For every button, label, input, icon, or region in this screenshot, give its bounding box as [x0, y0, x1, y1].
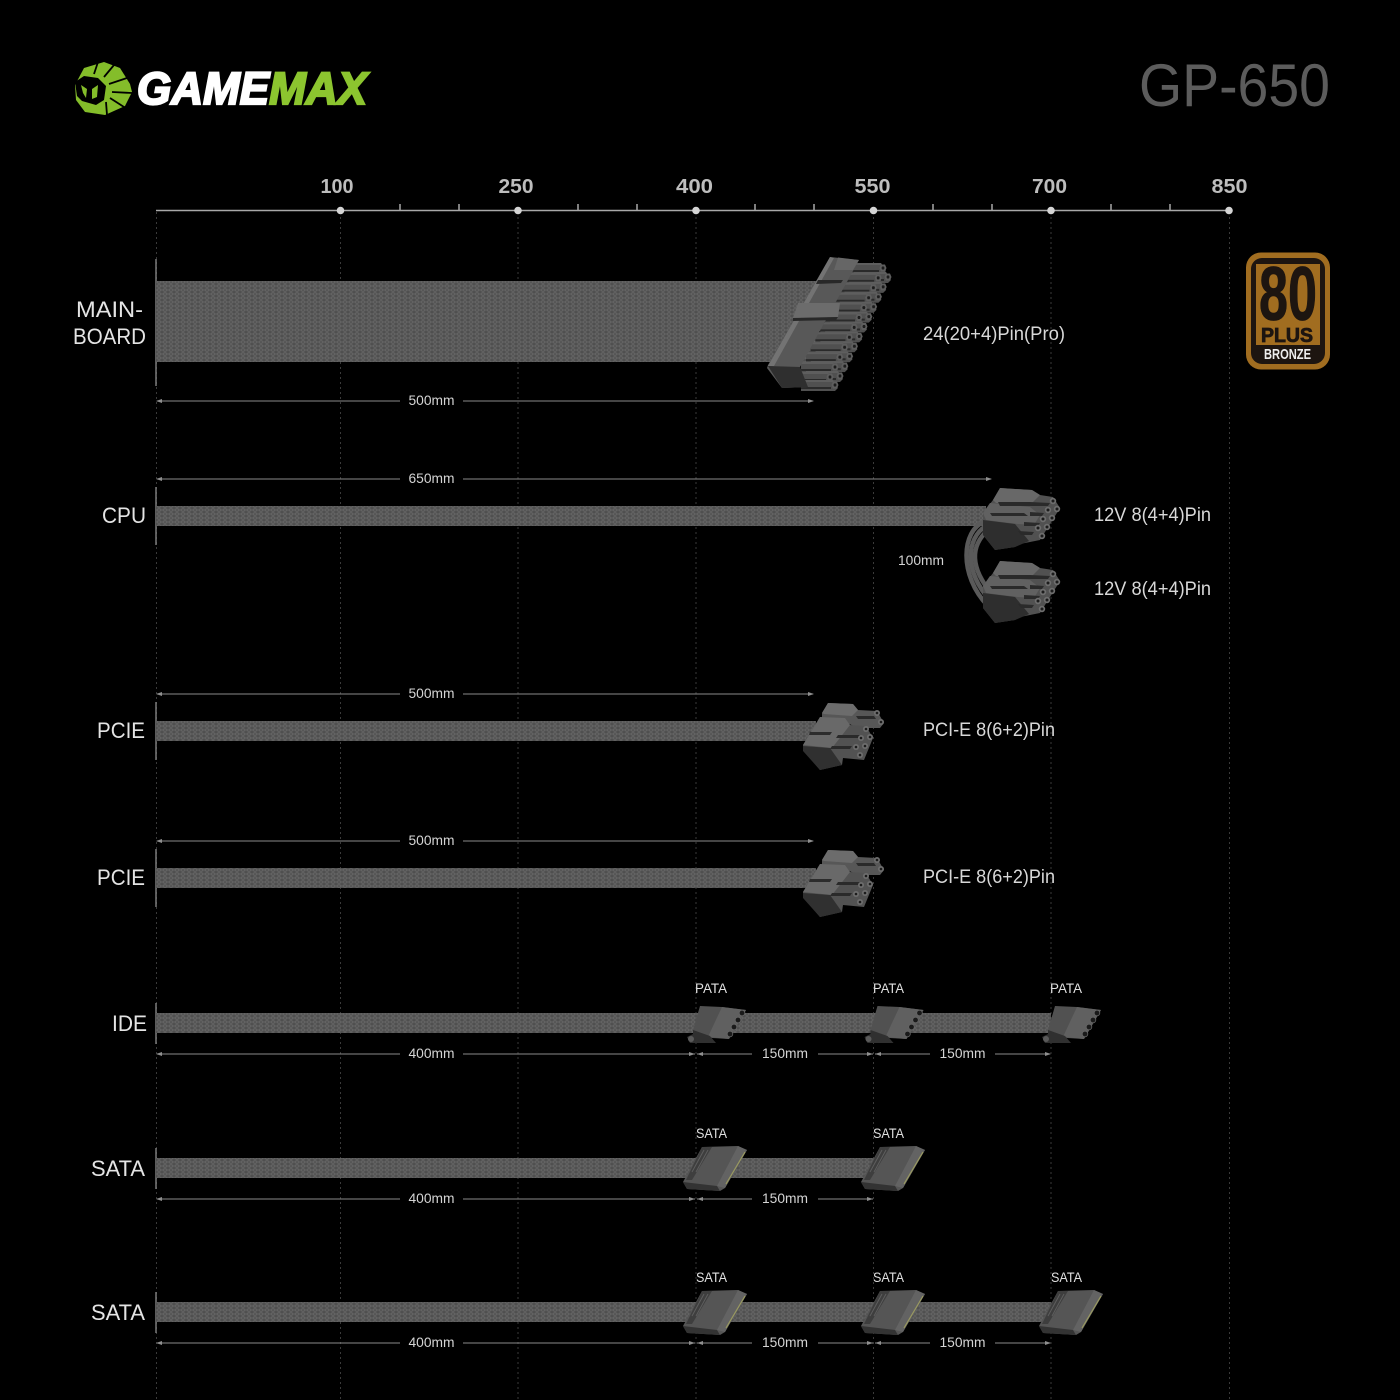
dimensions: 150mm	[762, 1045, 808, 1061]
row: CPU	[102, 470, 1211, 623]
row label: CPU	[102, 503, 146, 528]
connector label upper: 12V 8(4+4)Pin	[1094, 505, 1211, 526]
dimensions	[156, 1334, 1051, 1350]
connector: 8-pin upper	[983, 488, 1060, 550]
dimensions: 150mm	[762, 1190, 808, 1206]
connector: 24-pin	[767, 257, 892, 391]
badge: 80 Plus Bronze: PLUS	[1261, 325, 1313, 347]
length axis	[156, 176, 1248, 214]
row label: BOARD	[73, 324, 146, 349]
cable	[156, 868, 816, 888]
dimensions: 400mm	[408, 1190, 454, 1206]
connector: PATA 2	[864, 1006, 924, 1043]
row label: SATA	[91, 1156, 145, 1181]
logo: GAMEMAX	[75, 62, 370, 115]
icon: lion head	[75, 62, 132, 115]
connector: PATA 3	[1042, 1006, 1101, 1043]
row label: MAIN-	[76, 297, 143, 322]
connector: PCI-E	[803, 850, 884, 917]
connector names: PATA	[1050, 980, 1083, 996]
connector names	[695, 980, 1083, 996]
row: PCIE 1	[97, 685, 1055, 770]
dimension: 500mm	[156, 832, 814, 848]
cable	[156, 1158, 876, 1178]
connector: SATA 3	[1039, 1290, 1103, 1335]
row label: SATA	[91, 1300, 145, 1325]
connector label: PCI-E 8(6+2)Pin	[923, 720, 1055, 741]
model title: GP-650	[1139, 52, 1330, 119]
dimension: 650mm	[156, 470, 992, 486]
length axis: 550	[854, 176, 890, 198]
dimension: 500mm	[156, 685, 814, 701]
cable	[156, 1013, 1051, 1033]
connector label: 24(20+4)Pin(Pro)	[923, 324, 1065, 345]
dimensions: 400mm	[408, 1334, 454, 1350]
row label: PCIE	[97, 865, 145, 890]
dimensions	[156, 1045, 1051, 1061]
cable	[156, 506, 986, 526]
row label	[73, 297, 146, 349]
connector names: SATA	[873, 1125, 905, 1141]
row label: IDE	[112, 1011, 147, 1036]
dimension: 500mm: 500mm	[408, 685, 454, 701]
length axis: 100	[320, 176, 354, 198]
row: IDE	[112, 980, 1101, 1061]
dimensions: 150mm	[940, 1334, 986, 1350]
connector names: SATA	[696, 1269, 728, 1285]
connector names: PATA	[873, 980, 905, 996]
connector names: SATA	[696, 1125, 728, 1141]
dimensions: 150mm	[762, 1334, 808, 1350]
cable	[156, 281, 818, 362]
connector: SATA 1	[683, 1146, 747, 1191]
connector: 8-pin lower	[983, 561, 1060, 623]
length axis: 400	[676, 176, 713, 198]
row label: PCIE	[97, 718, 145, 743]
dimension: 100mm: 100mm	[898, 552, 944, 568]
connector: PCI-E	[803, 703, 884, 770]
connector: SATA 1	[683, 1290, 747, 1335]
connector names: SATA	[1051, 1269, 1083, 1285]
connector label: PCI-E 8(6+2)Pin	[923, 867, 1055, 888]
dimension: 500mm	[156, 392, 814, 408]
connector: SATA 2	[861, 1146, 925, 1191]
dimension: 500mm: 500mm	[408, 392, 454, 408]
dotted guide lines	[156, 212, 1230, 1400]
length axis: 700	[1032, 176, 1067, 198]
cable	[156, 721, 816, 741]
wordmark: GAMEMAX	[137, 63, 370, 114]
connector names: SATA	[873, 1269, 905, 1285]
connector names: PATA	[695, 980, 728, 996]
row: main board	[73, 257, 1065, 408]
dimensions	[156, 1190, 873, 1206]
badge: 80 Plus Bronze	[1246, 252, 1330, 370]
connector: PATA 1	[687, 1006, 746, 1043]
row: SATA 2	[91, 1269, 1103, 1350]
connector names	[696, 1269, 1083, 1285]
row: PCIE 2	[97, 832, 1055, 917]
row: SATA 1	[91, 1125, 925, 1206]
dimensions: 150mm	[940, 1045, 986, 1061]
length axis: 850	[1212, 176, 1248, 198]
dimension: 650mm: 650mm	[408, 470, 454, 486]
dimensions: 400mm	[408, 1045, 454, 1061]
badge: 80 Plus Bronze: 80	[1259, 252, 1317, 337]
connector label lower: 12V 8(4+4)Pin	[1094, 579, 1211, 600]
length axis: 250	[498, 176, 534, 198]
connector: SATA 2	[861, 1290, 925, 1335]
badge: 80 Plus Bronze: BRONZE	[1264, 346, 1311, 363]
cable	[156, 1302, 1051, 1322]
branch cable: 100mm	[966, 522, 992, 606]
connector names	[696, 1125, 905, 1141]
dimension: 500mm: 500mm	[408, 832, 454, 848]
